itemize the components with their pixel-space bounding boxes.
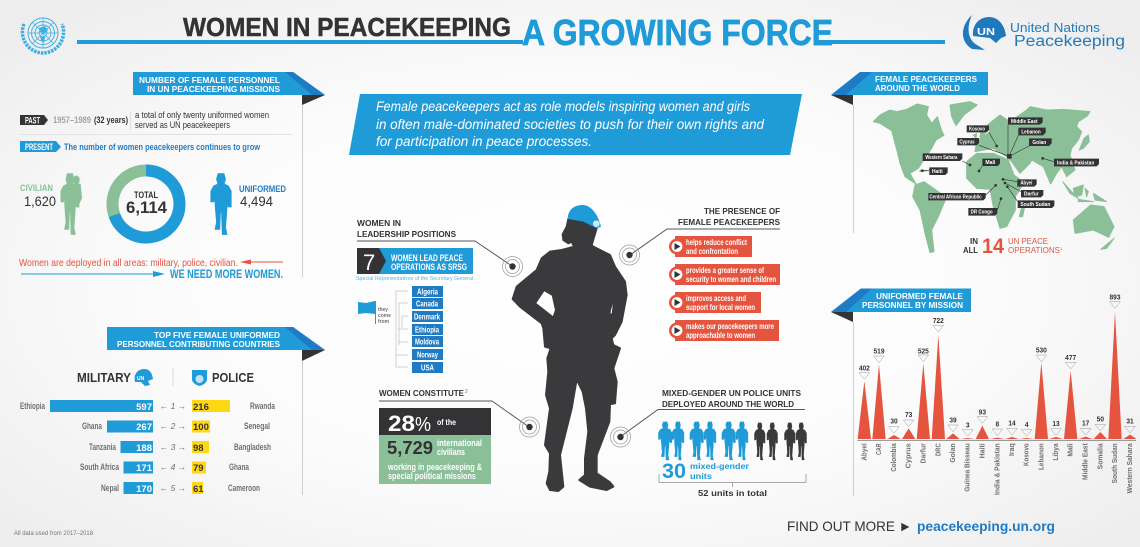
benefit 1: helps reduce conflict — [686, 237, 747, 247]
chart: mission triangles: 93 — [979, 409, 986, 416]
past row: PAST — [25, 116, 40, 126]
bar chart: rows: ← 1 → — [160, 401, 186, 411]
chart: mission triangles: 525 — [918, 348, 929, 355]
stat: 14 operations: ALL — [963, 245, 978, 255]
bar chart: rows: 188 — [136, 443, 152, 454]
banner: number of female personnel: NUMBER OF FEMALE PERSONNEL — [139, 75, 280, 85]
uniformed stat: 4,494 — [240, 194, 273, 209]
marker — [520, 417, 540, 437]
stat box: international — [437, 438, 482, 448]
callout: intro text: for participation in peace processes. — [376, 133, 592, 149]
stat: 14 operations: OPERATIONS — [1008, 245, 1060, 255]
stat: 14 operations: UN PEACE — [1008, 236, 1048, 246]
chart: mission triangles: DRC — [935, 443, 942, 456]
map: Golan — [1032, 140, 1047, 146]
callout: deployed in all areas: WE NEED MORE WOMEN. — [170, 269, 283, 281]
banner: by mission: UNIFORMED FEMALE — [876, 291, 963, 301]
map: Lebanon — [1021, 129, 1041, 135]
banner: around the world: AROUND THE WORLD — [875, 83, 960, 93]
title rule — [77, 40, 945, 44]
heading: military: MILITARY — [77, 371, 132, 385]
chart: mission triangles: 402 — [859, 365, 870, 372]
bar chart: rows: Nepal — [101, 483, 119, 494]
panel: presence of female peacekeepers — [620, 206, 780, 341]
chart: mission triangles: Mali — [1068, 443, 1075, 457]
chart: mission triangles: Haiti — [979, 443, 986, 458]
chart: mission triangles: Middle East — [1083, 443, 1090, 480]
bar chart: rows: ← 5 → — [160, 483, 186, 493]
panel: women in leadership — [356, 218, 522, 373]
heading: presence: FEMALE PEACEKEEPERS — [678, 217, 780, 227]
heading: police: POLICE — [212, 371, 254, 385]
list: countries: Ethiopia — [415, 324, 439, 334]
bar chart: rows: Bangladesh — [234, 442, 271, 453]
bar chart: rows: 216 — [193, 402, 209, 413]
title: A GROWING FORCE — [522, 12, 833, 53]
heading: military: UN — [137, 376, 145, 382]
heading: leadership: LEADERSHIP POSITIONS — [357, 229, 456, 239]
bar chart: rows: 267 — [136, 422, 152, 433]
callout: deployed in all areas — [19, 257, 283, 281]
stat box — [379, 408, 491, 484]
civilian stat — [20, 174, 81, 234]
title: WOMEN IN PEACEKEEPING — [183, 12, 511, 42]
stat: seven women: Special Representatives of the Secretary General — [356, 276, 473, 282]
map: Mali — [985, 160, 996, 166]
chart: mission triangles: 50 — [1097, 416, 1104, 423]
stat: seven women — [356, 248, 473, 282]
banner: number of female personnel: IN UN PEACEKEEPING MISSIONS — [147, 84, 280, 94]
banner: around the world — [831, 72, 988, 105]
past row: a total of only twenty uniformed women — [135, 110, 269, 120]
chart: mission triangles: 13 — [1052, 421, 1060, 428]
stat: 30 mixed-gender units: mixed-gender — [690, 461, 750, 471]
marker — [620, 245, 640, 265]
heading: mixed-gender: DEPLOYED AROUND THE WORLD — [662, 399, 794, 409]
logo: UN Peacekeeping: Peacekeeping — [1014, 33, 1125, 50]
soldier silhouette — [513, 205, 627, 491]
bar chart: rows: Ghana — [82, 421, 102, 432]
bar chart: rows: South Africa — [80, 462, 119, 473]
bar chart: rows: 98 — [193, 443, 204, 454]
banner: by mission — [831, 288, 971, 322]
stat: 30 mixed-gender units — [662, 460, 750, 483]
title — [183, 12, 833, 53]
heading: leadership: WOMEN IN — [357, 218, 401, 228]
bar chart: rows: ← 3 → — [160, 442, 186, 452]
map — [873, 102, 1114, 253]
panel: women constitute — [379, 388, 540, 484]
bar chart: rows: 171 — [136, 463, 153, 474]
chart: mission triangles: Cyprus — [906, 443, 913, 468]
chart: mission triangles: Guinea Bisseau — [965, 443, 972, 492]
bar chart: rows: Senegal — [244, 421, 270, 432]
callout: intro text: in often male-dominated societies to push for their own rights and — [376, 116, 765, 132]
chart: mission triangles: Lebanon — [1038, 443, 1045, 470]
heading: military — [77, 369, 153, 386]
list: countries: Norway — [417, 350, 438, 360]
stat box: 5,729 — [387, 437, 433, 458]
heading: mixed-gender: MIXED-GENDER UN POLICE UNITS — [662, 388, 801, 398]
benefit 2: security to women and children — [686, 274, 776, 284]
chart: mission triangles: South Sudan — [1112, 443, 1119, 483]
donut chart — [112, 170, 179, 237]
footnote: All data used from 2017–2018 — [14, 530, 93, 537]
chart: mission triangles: 73 — [905, 412, 912, 419]
donut chart: TOTAL — [134, 190, 158, 201]
chart: mission triangles: Libya — [1053, 443, 1060, 461]
stat box: special political missions — [388, 471, 476, 481]
bar chart: rows: Cameroon — [228, 483, 260, 494]
chart: mission triangles: 4 — [1025, 422, 1029, 429]
panel: uniformed female personnel by mission — [831, 288, 1137, 496]
chart: mission triangles: 477 — [1065, 355, 1076, 362]
bar chart: rows: 597 — [136, 402, 152, 413]
stat: 30 mixed-gender units: units — [690, 471, 712, 481]
map: Middle East — [1011, 119, 1038, 125]
bar chart: rows: 100 — [193, 422, 209, 433]
panel: world map — [831, 72, 1114, 258]
benefit 3: support for local women — [686, 302, 755, 312]
panel: number of female personnel — [19, 72, 325, 281]
list: countries: Moldova — [415, 336, 439, 346]
icon: flag: come — [378, 313, 391, 319]
banner: top five: PERSONNEL CONTRIBUTING COUNTRIES — [117, 339, 280, 349]
bar chart: rows: 170 — [136, 484, 152, 495]
total label: 52 units in total — [698, 488, 767, 498]
chart: mission triangles: 722 — [933, 318, 944, 325]
present row — [20, 141, 260, 153]
present row: PRESENT — [25, 142, 53, 152]
chart: mission triangles: Golan — [950, 443, 957, 463]
logo: UN Peacekeeping: United Nations — [1010, 21, 1100, 35]
map: DR Congo — [971, 210, 993, 216]
benefit 4 — [669, 320, 779, 341]
benefit 2: provides a greater sense of — [686, 265, 764, 275]
chart: mission triangles — [857, 294, 1137, 495]
footer link: peacekeeping.un.org — [917, 518, 1055, 534]
bar chart: rows: ← 2 → — [160, 421, 186, 431]
map: Kosovo — [969, 127, 985, 133]
callout: deployed in all areas: Women are deployed in all areas: military, police, civilian. — [19, 257, 238, 269]
list: countries: Canada — [416, 298, 438, 308]
past row: served as UN peacekeepers — [135, 120, 230, 130]
benefit 3: improves access and — [686, 293, 746, 303]
banner: by mission: PERSONNEL BY MISSION — [862, 300, 963, 310]
heading: women constitute: 2 — [465, 389, 468, 395]
chart: mission triangles: India & Pakistan — [994, 443, 1001, 495]
chart: mission triangles: 31 — [1126, 419, 1134, 426]
banner: around the world: FEMALE PEACEKEEPERS — [875, 74, 977, 84]
chart: mission triangles: Somalia — [1097, 443, 1104, 469]
chart: mission triangles: 8 — [995, 421, 999, 428]
connectors — [396, 291, 408, 367]
past row: 1957–1989 — [53, 115, 91, 125]
banner: number of female personnel — [133, 72, 325, 105]
list: countries: Algeria — [417, 286, 438, 296]
bar chart: rows: Ghana — [229, 462, 249, 473]
chart: mission triangles: 3 — [966, 422, 970, 429]
present row: The number of women peacekeepers continues to grow — [64, 142, 260, 153]
bar chart: rows: Ethiopia — [20, 401, 45, 412]
chart: mission triangles: CAR — [876, 443, 883, 455]
chart: mission triangles: 17 — [1082, 420, 1089, 427]
callout: intro text: Female peacekeepers act as role models inspiring women and girls — [376, 98, 750, 114]
benefit 2 — [669, 264, 780, 285]
map: Western Sahara — [925, 155, 958, 161]
stat box: 28 — [388, 411, 415, 436]
benefit 4: makes our peacekeepers more — [686, 321, 774, 331]
map: Abyei — [1020, 181, 1033, 187]
stat box: working in peacekeeping & — [387, 462, 482, 472]
icon: UN emblem — [22, 18, 64, 53]
uniformed stat — [211, 174, 286, 234]
map: Darfur — [1024, 191, 1039, 197]
map: Cyprus — [959, 140, 975, 146]
chart: mission triangles: Abyei — [861, 443, 868, 461]
icon: flag: from — [378, 319, 389, 325]
stat box: % — [415, 414, 431, 436]
pictogram: units — [658, 422, 806, 460]
chart: mission triangles: 30 — [890, 419, 898, 426]
bar chart: rows: 79 — [193, 463, 204, 474]
heading: mixed-gender — [662, 388, 801, 409]
list: countries — [412, 286, 443, 373]
chart: mission triangles: 519 — [873, 348, 885, 355]
map: South Sudan — [1020, 202, 1051, 208]
panel: mixed-gender police units — [610, 388, 806, 498]
heading: leadership — [357, 218, 456, 239]
stat: 14 operations: 1 — [1060, 246, 1063, 251]
logo: UN Peacekeeping — [963, 15, 1125, 50]
bar chart: rows: 61 — [193, 484, 204, 495]
chart: mission triangles: Kosovo — [1024, 443, 1031, 466]
panel: top five contributing countries — [20, 327, 325, 495]
stat: seven women: WOMEN LEAD PEACE — [391, 253, 463, 264]
heading: police — [192, 370, 254, 386]
footer link: FIND OUT MORE ► — [787, 518, 912, 534]
stat: 14 operations: 14 — [982, 235, 1004, 258]
bar chart: rows: Rwanda — [250, 401, 275, 412]
stat box: of the — [437, 417, 456, 427]
chart: mission triangles: Western Sahara — [1127, 443, 1134, 493]
footer link — [787, 518, 1055, 534]
icon: flag: they — [378, 307, 389, 313]
stat: 30 mixed-gender units: 30 — [662, 460, 686, 483]
chart: mission triangles: 893 — [1109, 294, 1121, 301]
heading: presence — [678, 206, 780, 227]
stat: seven women: 7 — [363, 250, 375, 275]
map: India & Pakistan — [1057, 160, 1095, 166]
civilian stat: 1,620 — [24, 194, 56, 209]
chart: mission triangles: Iraq — [1009, 443, 1016, 456]
chart: mission triangles: 530 — [1036, 347, 1047, 354]
stat: seven women: OPERATIONS AS SRSG — [391, 262, 467, 273]
bar chart: rows: Tanzania — [89, 442, 116, 453]
donut chart: 6,114 — [126, 198, 168, 217]
past row — [20, 110, 269, 130]
chart: mission triangles: 14 — [1008, 420, 1016, 427]
heading: women constitute: WOMEN CONSTITUTE — [379, 388, 464, 398]
chart: mission triangles: Darfur — [920, 443, 927, 463]
chart: mission triangles: Colombia — [891, 443, 898, 472]
callout: intro text — [349, 94, 802, 155]
benefit 3 — [669, 292, 761, 313]
marker — [502, 256, 522, 276]
icon: flag — [358, 301, 391, 325]
benefit 1 — [669, 236, 752, 257]
bar chart: rows: ← 4 → — [160, 462, 186, 472]
past row: (32 years) — [94, 115, 128, 125]
banner: top five: TOP FIVE FEMALE UNIFORMED — [154, 330, 280, 340]
list: countries: USA — [421, 362, 434, 372]
stat: 14 operations: IN — [970, 236, 978, 246]
stat box: civilians — [437, 447, 465, 457]
list: countries: Denmark — [414, 312, 440, 322]
benefit 4: approachable to women — [686, 330, 755, 340]
banner: top five — [107, 327, 325, 361]
benefit 1: and confrontation — [686, 246, 738, 256]
chart: mission triangles: 39 — [949, 418, 957, 425]
logo: UN Peacekeeping: UN — [977, 27, 995, 38]
stat: 14 operations — [963, 235, 1063, 258]
map: Central African Republic — [929, 194, 982, 200]
civilian stat: CIVILIAN — [20, 183, 53, 194]
bar chart: rows — [20, 400, 275, 495]
heading: presence: THE PRESENCE OF — [704, 206, 780, 216]
uniformed stat: UNIFORMED — [239, 184, 286, 195]
map: Haiti — [932, 169, 943, 175]
marker — [610, 427, 630, 447]
